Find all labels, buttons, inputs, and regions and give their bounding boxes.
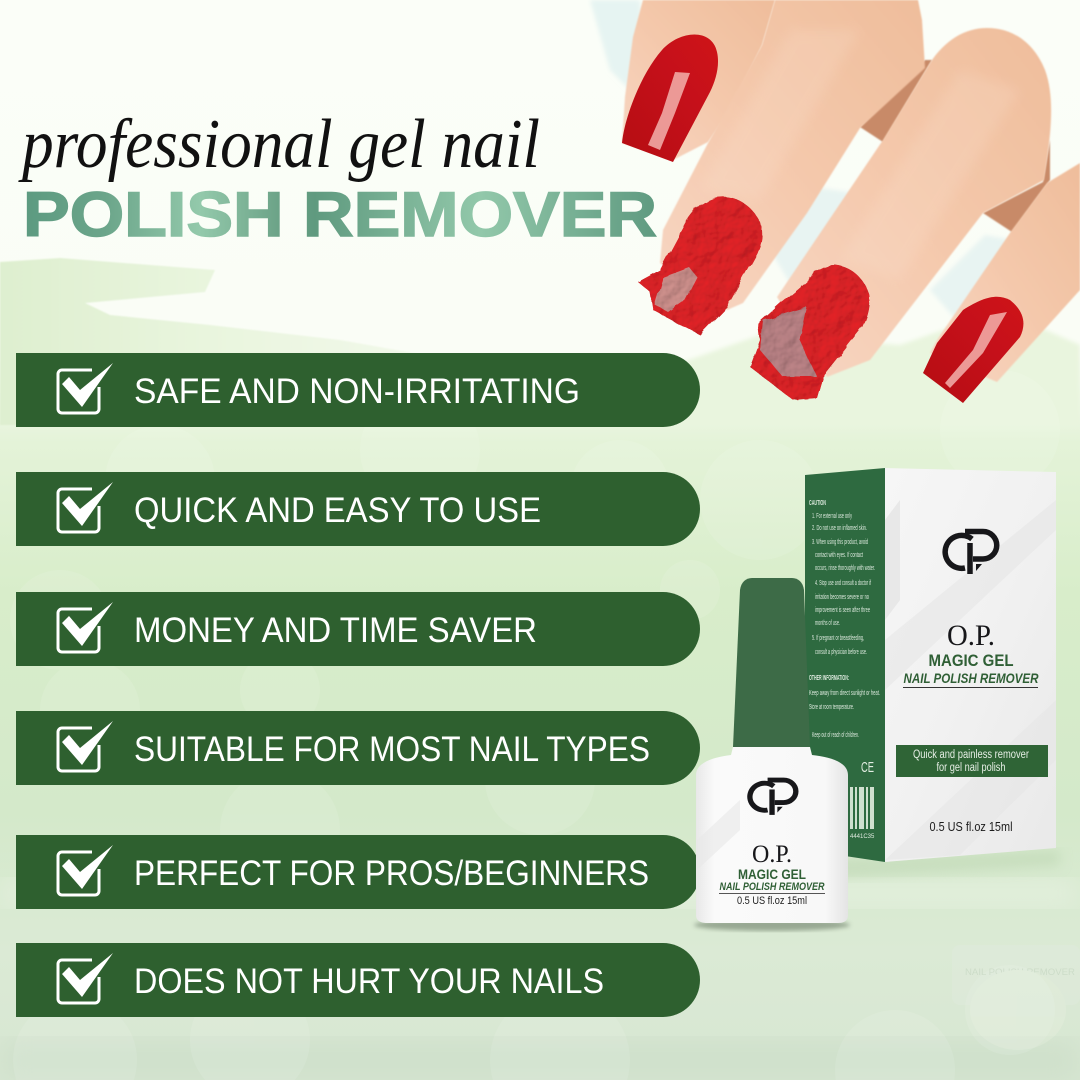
box side panel: Store at room temperature. — [809, 704, 854, 711]
logo — [750, 780, 796, 815]
box front panel: NAIL POLISH REMOVER — [904, 670, 1039, 686]
benefit 6: DOES NOT HURT YOUR NAILS — [134, 962, 604, 1001]
box side panel: consult a physician before use. — [815, 649, 867, 656]
box side panel: 3. When using this product, avoid — [812, 539, 868, 546]
benefit 5: PERFECT FOR PROS/BEGINNERS — [134, 854, 649, 893]
box front panel: Quick and painless remover — [913, 749, 1029, 761]
product box — [805, 468, 1060, 880]
finger 2 — [660, 0, 925, 310]
benefit 2 — [16, 472, 700, 546]
product bottle: 0.5 US fl.oz 15ml — [737, 895, 807, 907]
product bottle — [694, 578, 850, 931]
bottle body — [696, 747, 848, 923]
box side panel: Keep away from direct sunlight or heat. — [809, 690, 880, 697]
nail 4 glossy red — [923, 297, 1023, 403]
benefit 3: MONEY AND TIME SAVER — [134, 611, 537, 650]
title: professional gel nail: professional gel nail — [17, 106, 540, 183]
box side panel: CAUTION — [809, 500, 826, 507]
box front panel: O.P. — [947, 619, 995, 652]
box front panel: 0.5 US fl.oz 15ml — [930, 819, 1013, 834]
benefit 1 — [16, 353, 700, 427]
benefit 4: SUITABLE FOR MOST NAIL TYPES — [134, 730, 650, 769]
bottle cap — [733, 578, 810, 747]
box side panel: OTHER INFORMATION: — [809, 675, 849, 682]
box side panel: Keep out of reach of children. — [812, 732, 859, 739]
shadow between fingers — [860, 60, 1050, 232]
finger 3 — [777, 28, 1051, 377]
icon: checkbox — [58, 845, 113, 895]
benefit 3 — [16, 592, 700, 666]
icon: checkbox — [58, 363, 113, 413]
box side panel: 4441C35 — [850, 834, 875, 840]
box side panel: 2. Do not use on inflamed skin. — [812, 525, 867, 532]
benefit 5 — [16, 835, 700, 909]
reflection of product box — [952, 945, 1080, 1050]
product bottle: MAGIC GEL — [738, 866, 806, 882]
finger 1 — [622, 0, 775, 160]
logo — [945, 532, 997, 574]
box front panel — [885, 468, 1056, 862]
reflection of product box: NAIL POLISH REMOVER — [965, 967, 1076, 977]
nail 1 glossy red — [622, 34, 718, 162]
box side panel — [805, 468, 885, 862]
benefit 4 — [16, 711, 700, 785]
box side panel: improvement is seen after three — [815, 607, 870, 614]
benefit 1: SAFE AND NON-IRRITATING — [134, 372, 580, 411]
nail 3 peeling — [750, 265, 870, 400]
benefit 6 — [16, 943, 700, 1017]
box side panel: contact with eyes. If contact — [815, 552, 863, 559]
box front panel: MAGIC GEL — [928, 651, 1014, 670]
photo: hand with red nails — [622, 0, 1080, 403]
icon: checkbox — [58, 721, 113, 771]
product bottle: NAIL POLISH REMOVER — [720, 881, 825, 893]
box side panel: months of use. — [815, 620, 840, 627]
title: POLISH REMOVER: POLISH REMOVER — [23, 180, 657, 250]
product bottle: O.P. — [752, 841, 792, 868]
nail 2 peeling — [638, 197, 762, 335]
box front panel: for gel nail polish — [936, 762, 1006, 774]
box side panel: occurs, rinse thoroughly with water. — [815, 565, 875, 572]
icon: checkbox — [58, 953, 113, 1003]
box side panel: 4. Stop use and consult a doctor if — [815, 580, 871, 587]
icon: checkbox — [58, 602, 113, 652]
box side panel: CE — [861, 759, 874, 776]
benefit 2: QUICK AND EASY TO USE — [134, 491, 541, 530]
box side panel: irritation becomes severe or no — [815, 594, 869, 601]
finger 4 — [930, 163, 1080, 382]
box side panel: 5. If pregnant or breastfeeding, — [812, 635, 864, 642]
box side panel: 1. For external use only — [812, 513, 852, 520]
icon: checkbox — [58, 482, 113, 532]
